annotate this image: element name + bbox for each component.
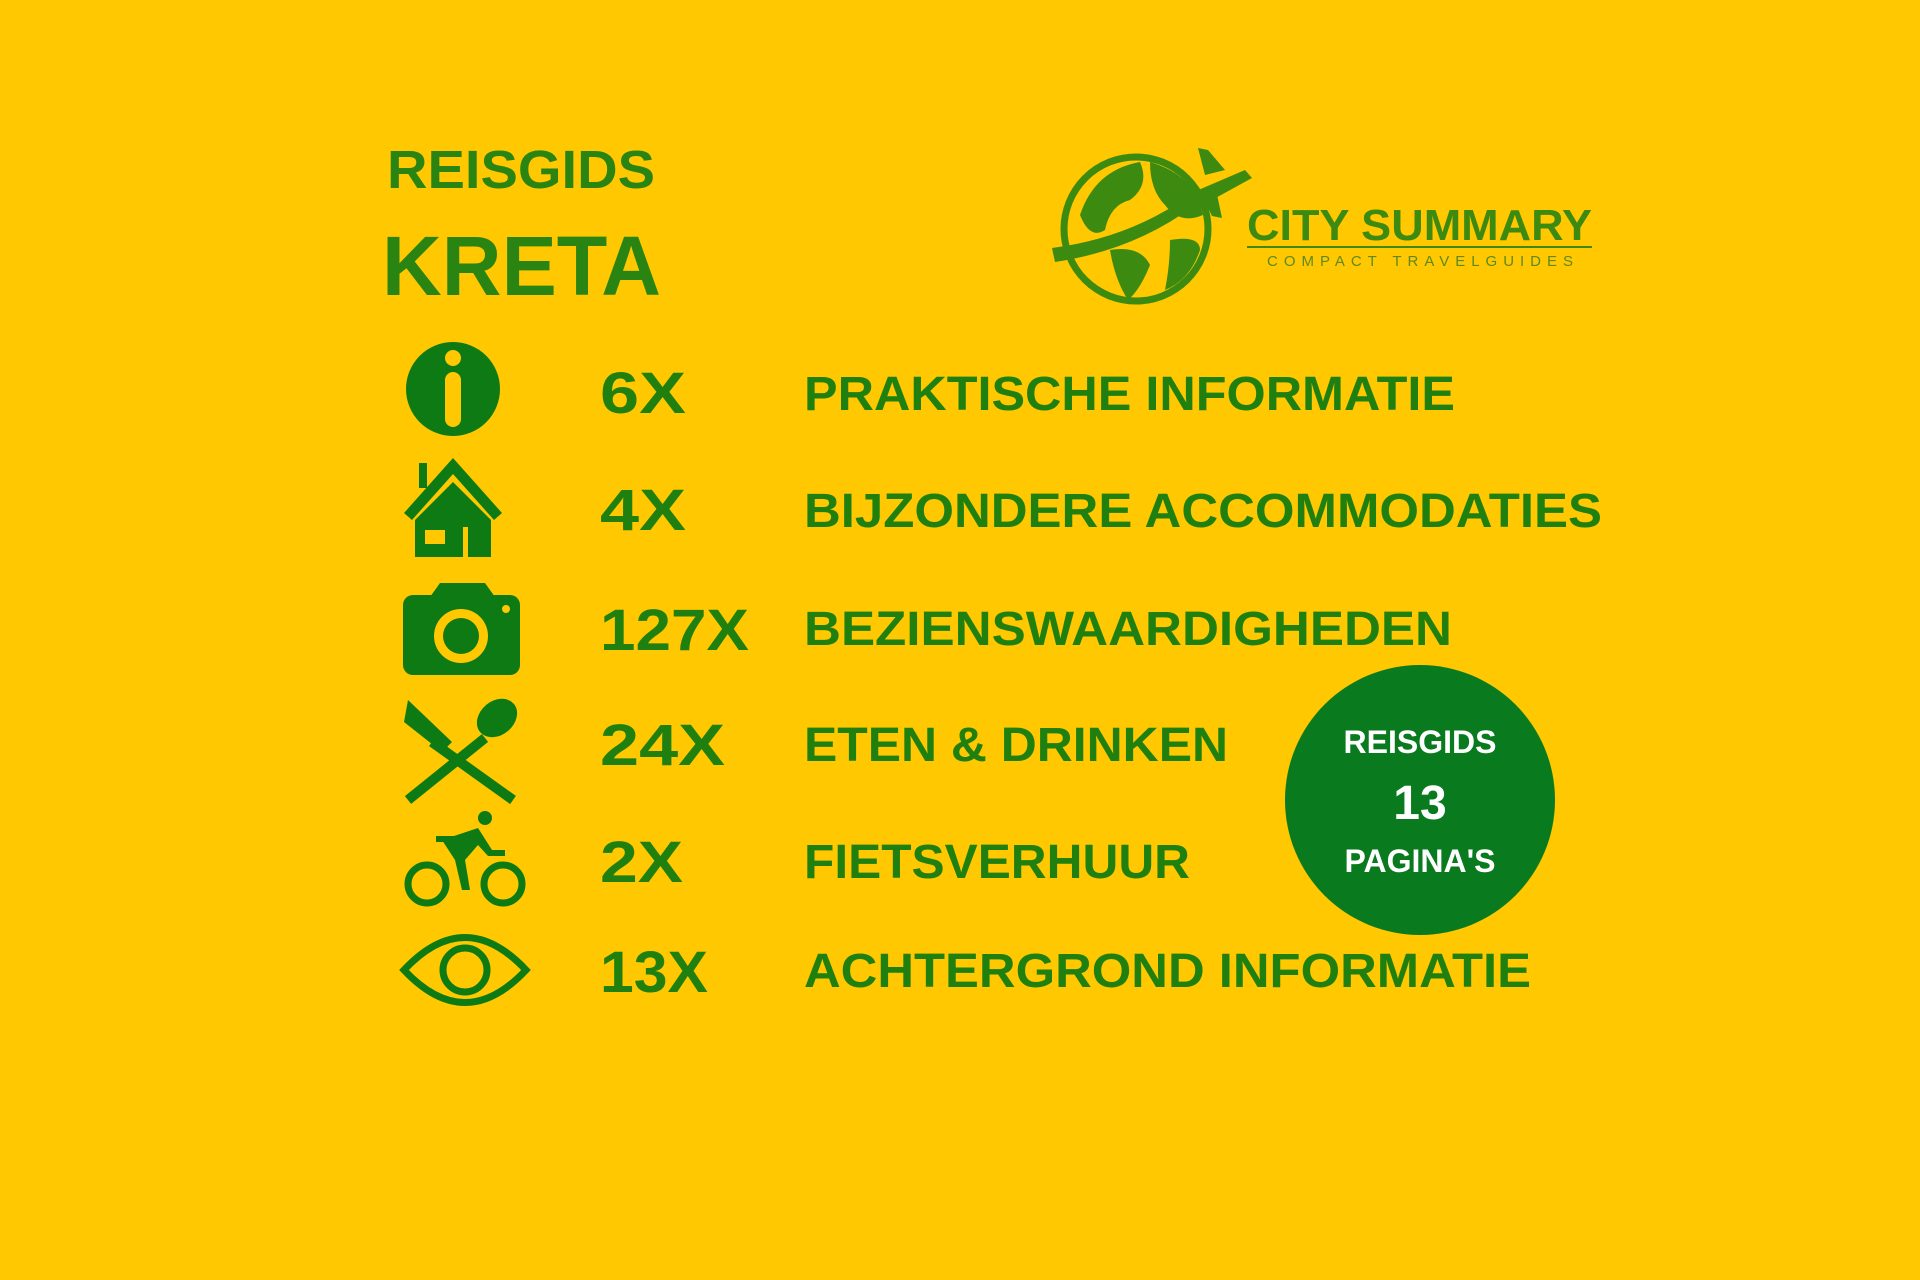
- icon: camera: [403, 583, 520, 675]
- row: praktische informatie: PRAKTISCHE INFORMATIE: [804, 368, 1455, 421]
- row: bezienswaardigheden: [600, 598, 1452, 663]
- row: accommodaties: 4X: [600, 478, 686, 543]
- row: fietsverhuur: [600, 830, 1190, 895]
- icon: info: [406, 342, 500, 436]
- row: accommodaties: BIJZONDERE ACCOMMODATIES: [804, 485, 1602, 538]
- badge: reisgids 13 pagina's: REISGIDS: [1344, 724, 1496, 760]
- row: praktische informatie: [600, 361, 1455, 426]
- icon: house: [404, 458, 502, 557]
- icon: globe with plane: [1052, 148, 1252, 301]
- row: achtergrond informatie: ACHTERGROND INFORMATIE: [804, 945, 1531, 998]
- row: bezienswaardigheden: 127X: [600, 598, 749, 663]
- title: reisgids: REISGIDS: [387, 140, 655, 200]
- row: fietsverhuur: FIETSVERHUUR: [804, 836, 1190, 889]
- row: eten & drinken: [600, 713, 1228, 778]
- logo: city summary: COMPACT TRAVELGUIDES: [1267, 253, 1573, 270]
- icon: knife and spoon: [404, 691, 525, 800]
- badge: reisgids 13 pagina's: 13: [1393, 777, 1447, 830]
- row: bezienswaardigheden: BEZIENSWAARDIGHEDEN: [804, 603, 1452, 656]
- logo: city summary: [1052, 148, 1592, 301]
- badge: reisgids 13 pagina's: PAGINA'S: [1344, 843, 1496, 879]
- icon: cyclist: [408, 811, 522, 903]
- logo text: CITY SUMMARY: [1247, 201, 1592, 250]
- badge: reisgids 13 pagina's: [1285, 665, 1555, 935]
- row: eten & drinken: 24X: [600, 713, 725, 778]
- row: accommodaties: [600, 478, 1602, 543]
- row: achtergrond informatie: [600, 940, 1531, 1005]
- list: counts and categories: [600, 361, 1602, 1005]
- row: fietsverhuur: 2X: [600, 830, 683, 895]
- row: achtergrond informatie: 13X: [600, 940, 708, 1005]
- title: kreta: KRETA: [382, 219, 661, 313]
- row: eten & drinken: ETEN & DRINKEN: [804, 719, 1228, 772]
- row: praktische informatie: 6X: [600, 361, 686, 426]
- icon: eye: [404, 938, 526, 1002]
